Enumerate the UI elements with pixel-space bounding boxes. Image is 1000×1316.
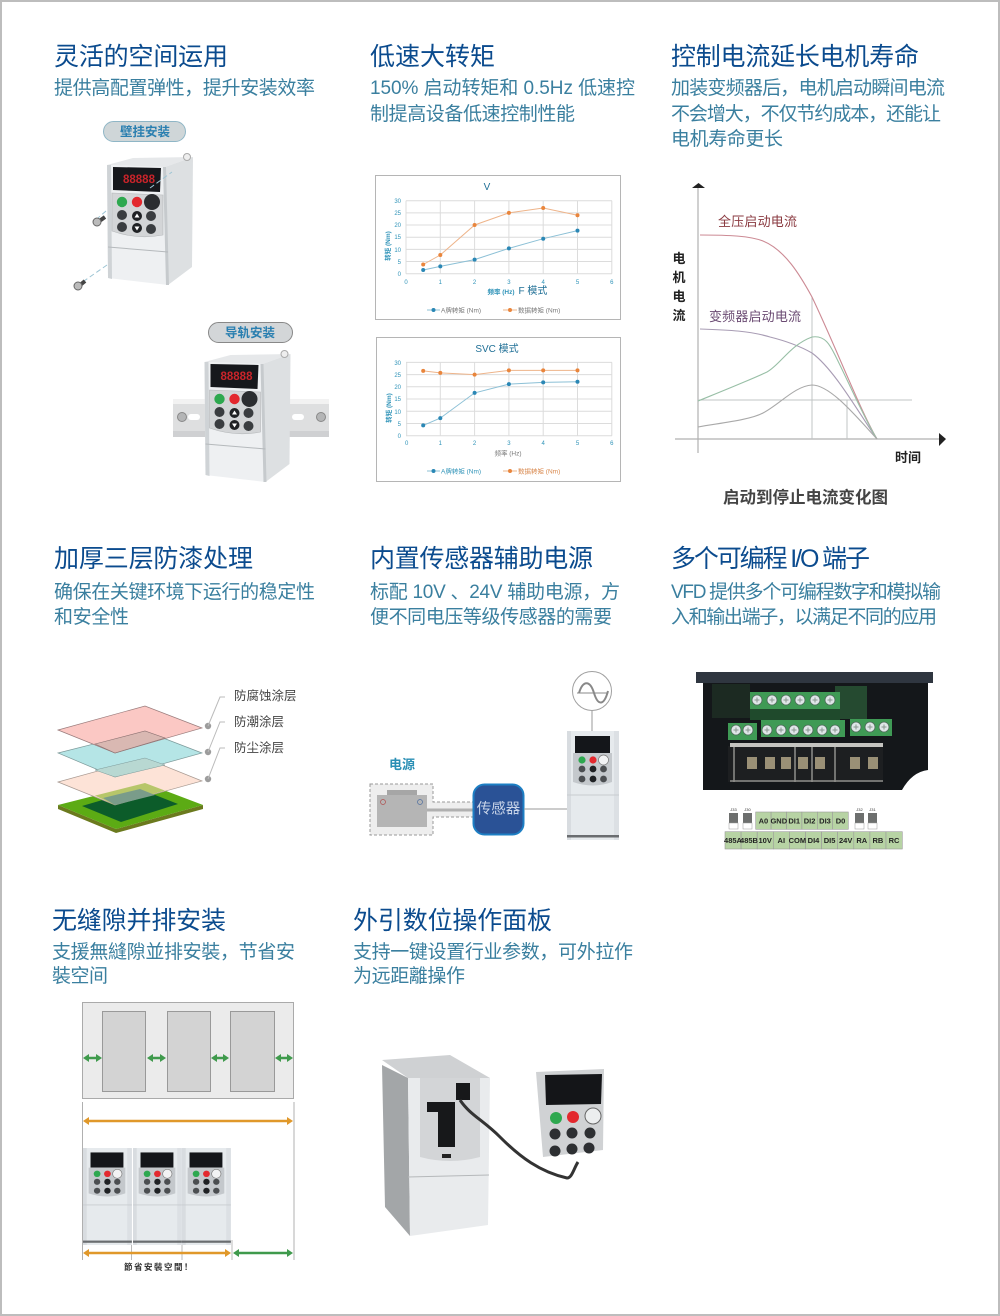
diagram: terminal labels: DI1 <box>788 816 800 826</box>
chart: SVC mode torque: 数据转矩 (Nm) <box>518 466 560 476</box>
diagram: compact spacing with drives <box>82 1102 294 1272</box>
chart: V/F mode torque: 3 <box>507 280 511 286</box>
diagram: terminal labels: GND <box>770 816 788 826</box>
chart: V/F mode torque: 6 <box>610 280 614 286</box>
diagram: terminal labels: DI5 <box>824 836 835 845</box>
chart: SVC mode torque: 0 <box>398 434 402 440</box>
chart: V/F mode torque: 0 <box>398 272 402 278</box>
chart: SVC mode torque: 20 <box>394 385 402 391</box>
chart: start to stop current curves: 变频器启动电流 <box>709 309 801 324</box>
chart: V/F mode torque: 2 <box>473 280 477 286</box>
chart: V/F mode torque: 数据转矩 (Nm) <box>518 306 560 314</box>
diagram: terminal labels: RB <box>872 836 884 845</box>
text: terminal description: 入和输出端子，以满足不同的应用 <box>671 606 937 628</box>
panel: programmable I/O terminals <box>671 545 941 849</box>
heading: sensor power: 内置传感器辅助电源 <box>370 545 593 573</box>
chart: SVC mode torque: 4 <box>542 441 546 447</box>
chart: V/F mode torque: 1 <box>439 280 443 286</box>
panel: side-by-side install <box>52 907 295 1272</box>
text: terminal description: VFD 提供多个可编程数字和模拟输 <box>671 581 941 603</box>
label: wall mount: 壁挂安装 <box>120 124 170 139</box>
chart: start to stop current curves <box>672 183 946 465</box>
panel: flexible space use <box>54 43 329 482</box>
diagram: terminal labels: 485A <box>724 836 743 845</box>
diagram: coating layers over circuit board: 防尘涂层 <box>234 740 284 755</box>
chart: V/F mode torque: A牌转矩 (Nm) <box>441 306 481 314</box>
diagram: coating layers over circuit board: 防腐蚀涂层 <box>234 688 297 703</box>
text: side-by-side description <box>52 941 295 987</box>
diagram: coating layers over circuit board <box>58 688 297 833</box>
chart: SVC mode torque: 5 <box>576 441 580 447</box>
heading: low speed torque: 低速大转矩 <box>370 43 495 71</box>
heading: current control: 控制电流延长电机寿命 <box>671 43 919 71</box>
photo: open terminal block <box>696 672 933 790</box>
chart: SVC mode torque: 6 <box>610 441 614 447</box>
diagram: terminal labels: RA <box>856 836 868 845</box>
chart: V/F mode torque <box>376 176 620 320</box>
icon: rail-mounted drive <box>173 350 329 482</box>
diagram: terminal labels: DI2 <box>804 816 815 826</box>
chart: SVC mode torque: SVC 模式 <box>475 342 519 355</box>
diagram: compact spacing with drives: 節省安裝空間！ <box>124 1262 194 1272</box>
diagram: terminal labels <box>724 807 902 849</box>
text: sensor power description: 便不同电压等级传感器的需要 <box>370 606 612 628</box>
panel: external operation panel <box>353 907 633 1236</box>
chart: start to stop current curves: 时间 <box>895 450 921 465</box>
chart: start to stop current curves: 流 <box>672 308 686 323</box>
text: sensor power description <box>370 581 620 628</box>
chart: V/F mode torque: 4 <box>542 280 546 286</box>
chart: SVC mode torque: 3 <box>507 441 511 447</box>
diagram: terminal labels: J30 <box>744 807 751 812</box>
text: side-by-side description: 支援無縫隙並排安裝，节省安 <box>52 941 295 963</box>
text: external panel description: 支持一键设置行业参数，可外拉作 <box>353 941 633 963</box>
diagram: terminal labels: COM <box>789 836 806 845</box>
diagram: terminal labels: D0 <box>836 816 845 826</box>
chart: V/F mode torque: 25 <box>394 211 402 217</box>
text: terminal description <box>671 581 941 628</box>
diagram: terminal labels: DI4 <box>808 836 820 845</box>
chart: V/F mode torque: F 模式 <box>519 284 547 297</box>
text: side-by-side description: 裝空间 <box>52 965 108 987</box>
diagram: terminal labels: J32 <box>856 807 863 812</box>
diagram: terminal labels: 24V <box>839 836 852 845</box>
panel: built-in sensor power <box>370 545 620 840</box>
chart: V/F mode torque: 0 <box>404 280 408 286</box>
chart: SVC mode torque: 30 <box>394 361 402 367</box>
chart: SVC mode torque: 频率 (Hz) <box>494 448 522 458</box>
heading: external panel: 外引数位操作面板 <box>353 907 552 935</box>
chart: SVC mode torque: 0 <box>405 441 409 447</box>
heading: programmable terminals: 多个可编程 I/O 端子 <box>671 545 870 573</box>
chart: SVC mode torque <box>376 338 620 482</box>
panel: three-layer coating <box>54 545 315 833</box>
text: torque description: 150% 启动转矩和 0.5Hz 低速控 <box>370 77 635 99</box>
text: current control description: 不会增大，不仅节约成本，还能让 <box>671 103 941 125</box>
diagram: coating layers over circuit board: 防潮涂层 <box>234 714 284 729</box>
diagram: terminal labels: A0 <box>759 816 768 826</box>
diagram: terminal labels: J33 <box>730 807 737 812</box>
panel: low speed high torque <box>370 43 635 482</box>
chart: start to stop current curves: 全压启动电流 <box>718 214 797 229</box>
text: current control description: 加装变频器后，电机启动瞬间电流 <box>671 77 945 99</box>
chart: SVC mode torque: 25 <box>394 373 402 379</box>
chart: SVC mode torque: 15 <box>394 397 402 403</box>
text: torque description <box>370 77 635 125</box>
chart: V/F mode torque: 20 <box>394 223 402 229</box>
label: rail mount: 导轨安装 <box>225 325 275 340</box>
heading: coating: 加厚三层防漆处理 <box>54 545 253 573</box>
text: sensor power description: 标配 10V 、24V 辅助电源，方 <box>370 581 620 603</box>
diagram: battery, sensor and drive: 传感器 <box>477 800 521 818</box>
text: current control description: 电机寿命更长 <box>671 128 783 150</box>
text: external panel description <box>353 941 633 987</box>
chart: V/F mode torque: V <box>484 182 491 193</box>
text: flexible space description: 提供高配置弹性，提升安装效率 <box>54 77 315 99</box>
chart: start to stop current curves: 电 <box>672 251 686 266</box>
chart: V/F mode torque: 5 <box>398 260 402 266</box>
chart: V/F mode torque: 转矩 (Nm) <box>383 231 392 261</box>
diagram: battery, sensor and drive: 电源 <box>389 757 415 772</box>
chart: SVC mode torque: 1 <box>439 441 443 447</box>
chart: V/F mode torque: 5 <box>576 280 580 286</box>
chart caption: 启动到停止电流变化图 <box>723 487 888 507</box>
label: rail mount <box>208 322 292 342</box>
chart: V/F mode torque: 30 <box>394 199 402 205</box>
chart: V/F mode torque: 频率 (Hz) <box>487 287 515 296</box>
chart: V/F mode torque: 10 <box>394 248 402 254</box>
text: external panel description: 为远距離操作 <box>353 965 465 987</box>
chart: SVC mode torque: A牌转矩 (Nm) <box>441 466 481 476</box>
diagram: terminal labels: 485B <box>740 836 759 845</box>
chart: SVC mode torque: 5 <box>398 422 402 428</box>
diagram: conventional spacing <box>82 1002 294 1098</box>
diagram: terminal labels: J31 <box>869 807 876 812</box>
text: current control description <box>671 77 945 150</box>
chart: SVC mode torque: 2 <box>473 441 477 447</box>
heading: flexible space use: 灵活的空间运用 <box>54 43 228 71</box>
heading: side-by-side install: 无缝隙并排安装 <box>52 907 226 935</box>
diagram: terminal labels: RC <box>889 836 900 845</box>
icon: rail-mounted drive: 88888 <box>221 371 253 383</box>
chart: start to stop current curves: 电 <box>672 289 686 304</box>
icon: wall-mounted drive <box>74 154 193 290</box>
diagram: terminal labels: AI <box>778 836 785 845</box>
chart: SVC mode torque: 转矩 (Nm) <box>384 393 393 423</box>
photo: drive with detached keypad <box>382 1055 604 1236</box>
chart: V/F mode torque: 15 <box>394 235 402 241</box>
label: wall mount <box>104 122 186 142</box>
text: coating description <box>54 581 315 628</box>
text: torque description: 制提高设备低速控制性能 <box>370 103 575 125</box>
text: coating description: 确保在关键环境下运行的稳定性 <box>54 581 315 603</box>
diagram: terminal labels: 10V <box>759 836 772 845</box>
text: coating description: 和安全性 <box>54 606 129 628</box>
icon: wall-mounted drive: 88888 <box>123 174 156 186</box>
chart: SVC mode torque: 10 <box>394 410 402 416</box>
diagram: battery, sensor and drive <box>370 672 619 840</box>
diagram: terminal labels: DI3 <box>819 816 831 826</box>
chart: start to stop current curves: 机 <box>672 270 686 285</box>
panel: current control <box>671 43 946 507</box>
